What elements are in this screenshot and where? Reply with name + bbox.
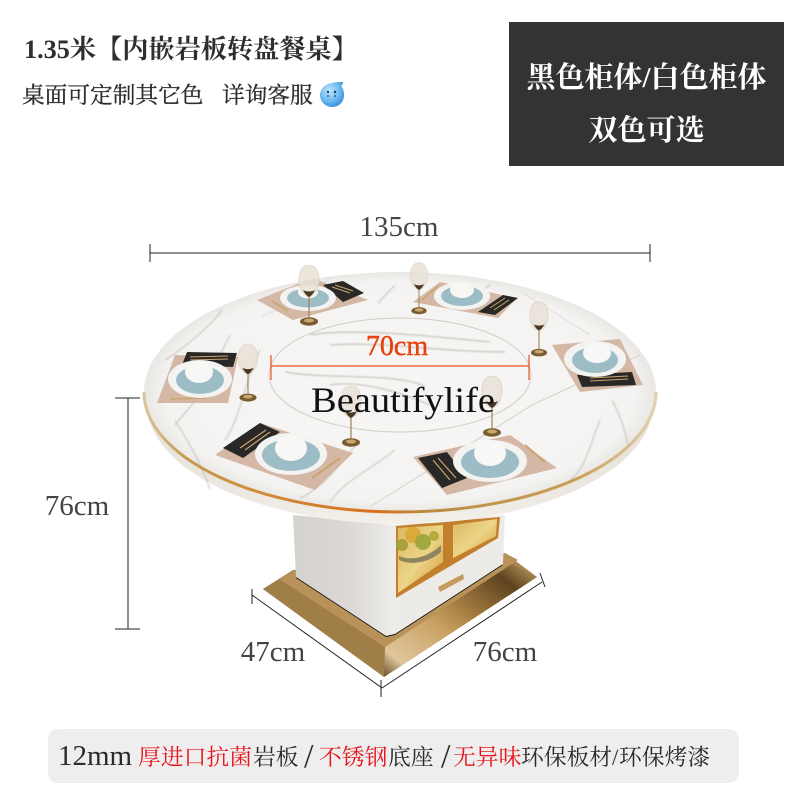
materials text: 底座 (388, 745, 434, 770)
materials text: 环保板材 (521, 745, 612, 770)
dimension: depth 47cm: 47cm (241, 636, 306, 668)
materials text: / (304, 738, 314, 775)
dimension: width 135cm: 135cm (360, 211, 439, 243)
materials text: 岩板 (253, 745, 299, 770)
gold edge (144, 392, 656, 512)
place setting: top left (257, 265, 368, 326)
panel: colour options: 双色可选 (588, 114, 705, 147)
icon: blue water drop mascot (320, 82, 344, 107)
dimension: height 76cm: 76cm (45, 490, 110, 522)
dimension: width 135cm (150, 211, 650, 262)
dimension: height 76cm (45, 398, 140, 629)
panel: colour options: 黑色柜体/白色柜体 (526, 61, 767, 94)
dimension: lazy susan 70cm (271, 331, 529, 380)
dimension: base width 76cm (381, 573, 545, 697)
place setting: top right (410, 263, 518, 318)
place setting: left (157, 344, 258, 403)
table base (263, 515, 537, 677)
panel: colour options (509, 22, 784, 166)
table rim (147, 284, 653, 524)
cabinet glass window with fruit (396, 517, 500, 598)
subtitle: customizable tabletop colour: 详询客服 (222, 83, 313, 108)
materials text: 环保烤漆 (619, 745, 710, 770)
marble tabletop (144, 272, 656, 512)
materials text: 无异味 (453, 745, 522, 770)
place setting: bottom right (413, 376, 557, 495)
title: 1.35米【内嵌岩板转盘餐桌】 (24, 34, 358, 64)
materials text: / (612, 745, 619, 770)
materials bar (48, 729, 739, 783)
place setting: bottom left (215, 386, 361, 490)
materials text: 12mm (58, 740, 133, 772)
table illustration (144, 263, 656, 677)
materials text: 不锈钢 (319, 745, 387, 770)
watermark: Beautifylife (311, 380, 495, 420)
place setting: right (530, 302, 643, 392)
materials text: / (441, 738, 451, 775)
materials text: 厚进口抗菌 (138, 745, 252, 770)
subtitle: customizable tabletop colour: 桌面可定制其它色 (22, 83, 204, 108)
dimension: base width 76cm: 76cm (473, 636, 538, 668)
dimension: lazy susan 70cm: 70cm (366, 331, 428, 362)
drawer handle (438, 574, 464, 592)
dimension: depth 47cm (241, 589, 382, 688)
lazy susan (269, 318, 531, 432)
